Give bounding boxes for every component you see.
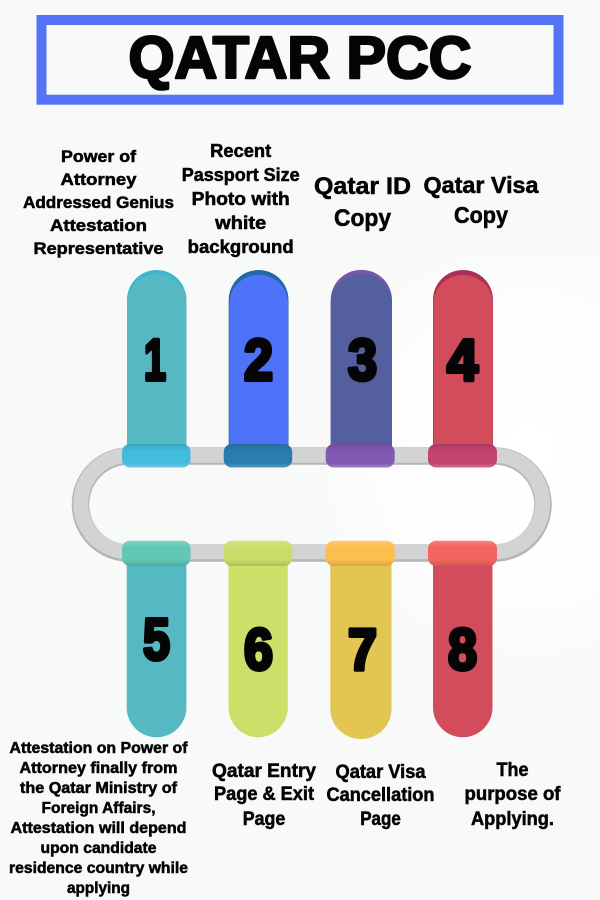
- text: item 8: Applying.: [471, 809, 554, 830]
- pill 6: [224, 541, 292, 737]
- text: item 5: Attestation on Power of: [10, 740, 188, 757]
- text: item 2: Photo with: [192, 189, 290, 209]
- text: item 5: residence country while: [9, 860, 188, 877]
- number 6: 6: [244, 618, 273, 682]
- number 7: 7: [348, 618, 377, 682]
- text: item 1: [23, 147, 174, 258]
- text: item 6: Page & Exit: [214, 784, 315, 805]
- number 4: 4: [447, 328, 478, 393]
- text: item 8: [464, 760, 561, 830]
- text: item 1: Attestation: [50, 216, 147, 235]
- text: item 2: Passport Size: [182, 165, 300, 185]
- title box: [42, 20, 558, 100]
- text: item 5: applying: [67, 880, 130, 897]
- text: item 6: [212, 761, 316, 830]
- text: item 5: Foreign Affairs,: [42, 800, 156, 817]
- text: item 8: The: [496, 760, 528, 781]
- text: item 3: Copy: [334, 205, 392, 232]
- number 8: 8: [448, 618, 477, 682]
- text: item 8: purpose of: [464, 784, 561, 805]
- text: item 1: Addressed Genius: [23, 193, 174, 212]
- pill 7: [326, 541, 395, 739]
- pill 4: [428, 270, 497, 468]
- text: item 6: Qatar Entry: [212, 761, 316, 782]
- text: item 7: Page: [360, 809, 401, 830]
- text: item 5: Attorney finally from: [20, 760, 177, 777]
- text: item 4: Copy: [454, 202, 508, 228]
- text: item 2: Recent: [210, 141, 271, 161]
- loop track: [80, 455, 543, 553]
- text: item 1: Representative: [34, 239, 164, 258]
- text: item 1: Power of: [61, 147, 136, 166]
- number 1: 1: [144, 328, 166, 393]
- text: item 4: [424, 172, 539, 228]
- text: item 7: Cancellation: [326, 785, 434, 806]
- pill 2: [224, 270, 292, 468]
- text: item 1: Attorney: [60, 170, 137, 189]
- text: item 4: Qatar Visa: [424, 172, 539, 198]
- text: item 2: white: [214, 213, 266, 233]
- number 5: 5: [143, 608, 170, 672]
- text: item 7: [326, 762, 434, 830]
- pill 3: [326, 270, 395, 468]
- title: QATAR PCC: [128, 25, 472, 91]
- text: item 6: Page: [243, 809, 285, 830]
- text: item 5: [9, 740, 188, 897]
- text: item 3: [314, 173, 411, 232]
- pill 5: [122, 541, 190, 737]
- text: item 2: [182, 141, 300, 257]
- number 3: 3: [348, 328, 377, 393]
- text: item 5: the Qatar Ministry of: [20, 780, 178, 797]
- text: item 3: Qatar ID: [314, 173, 411, 200]
- text: item 2: background: [188, 237, 294, 257]
- text: item 5: upon candidate: [40, 840, 157, 857]
- pill 1: [122, 270, 190, 468]
- text: item 7: Qatar Visa: [336, 762, 426, 783]
- text: item 5: Attestation will depend: [10, 820, 186, 837]
- number 2: 2: [244, 328, 273, 393]
- pill 8: [428, 541, 497, 737]
